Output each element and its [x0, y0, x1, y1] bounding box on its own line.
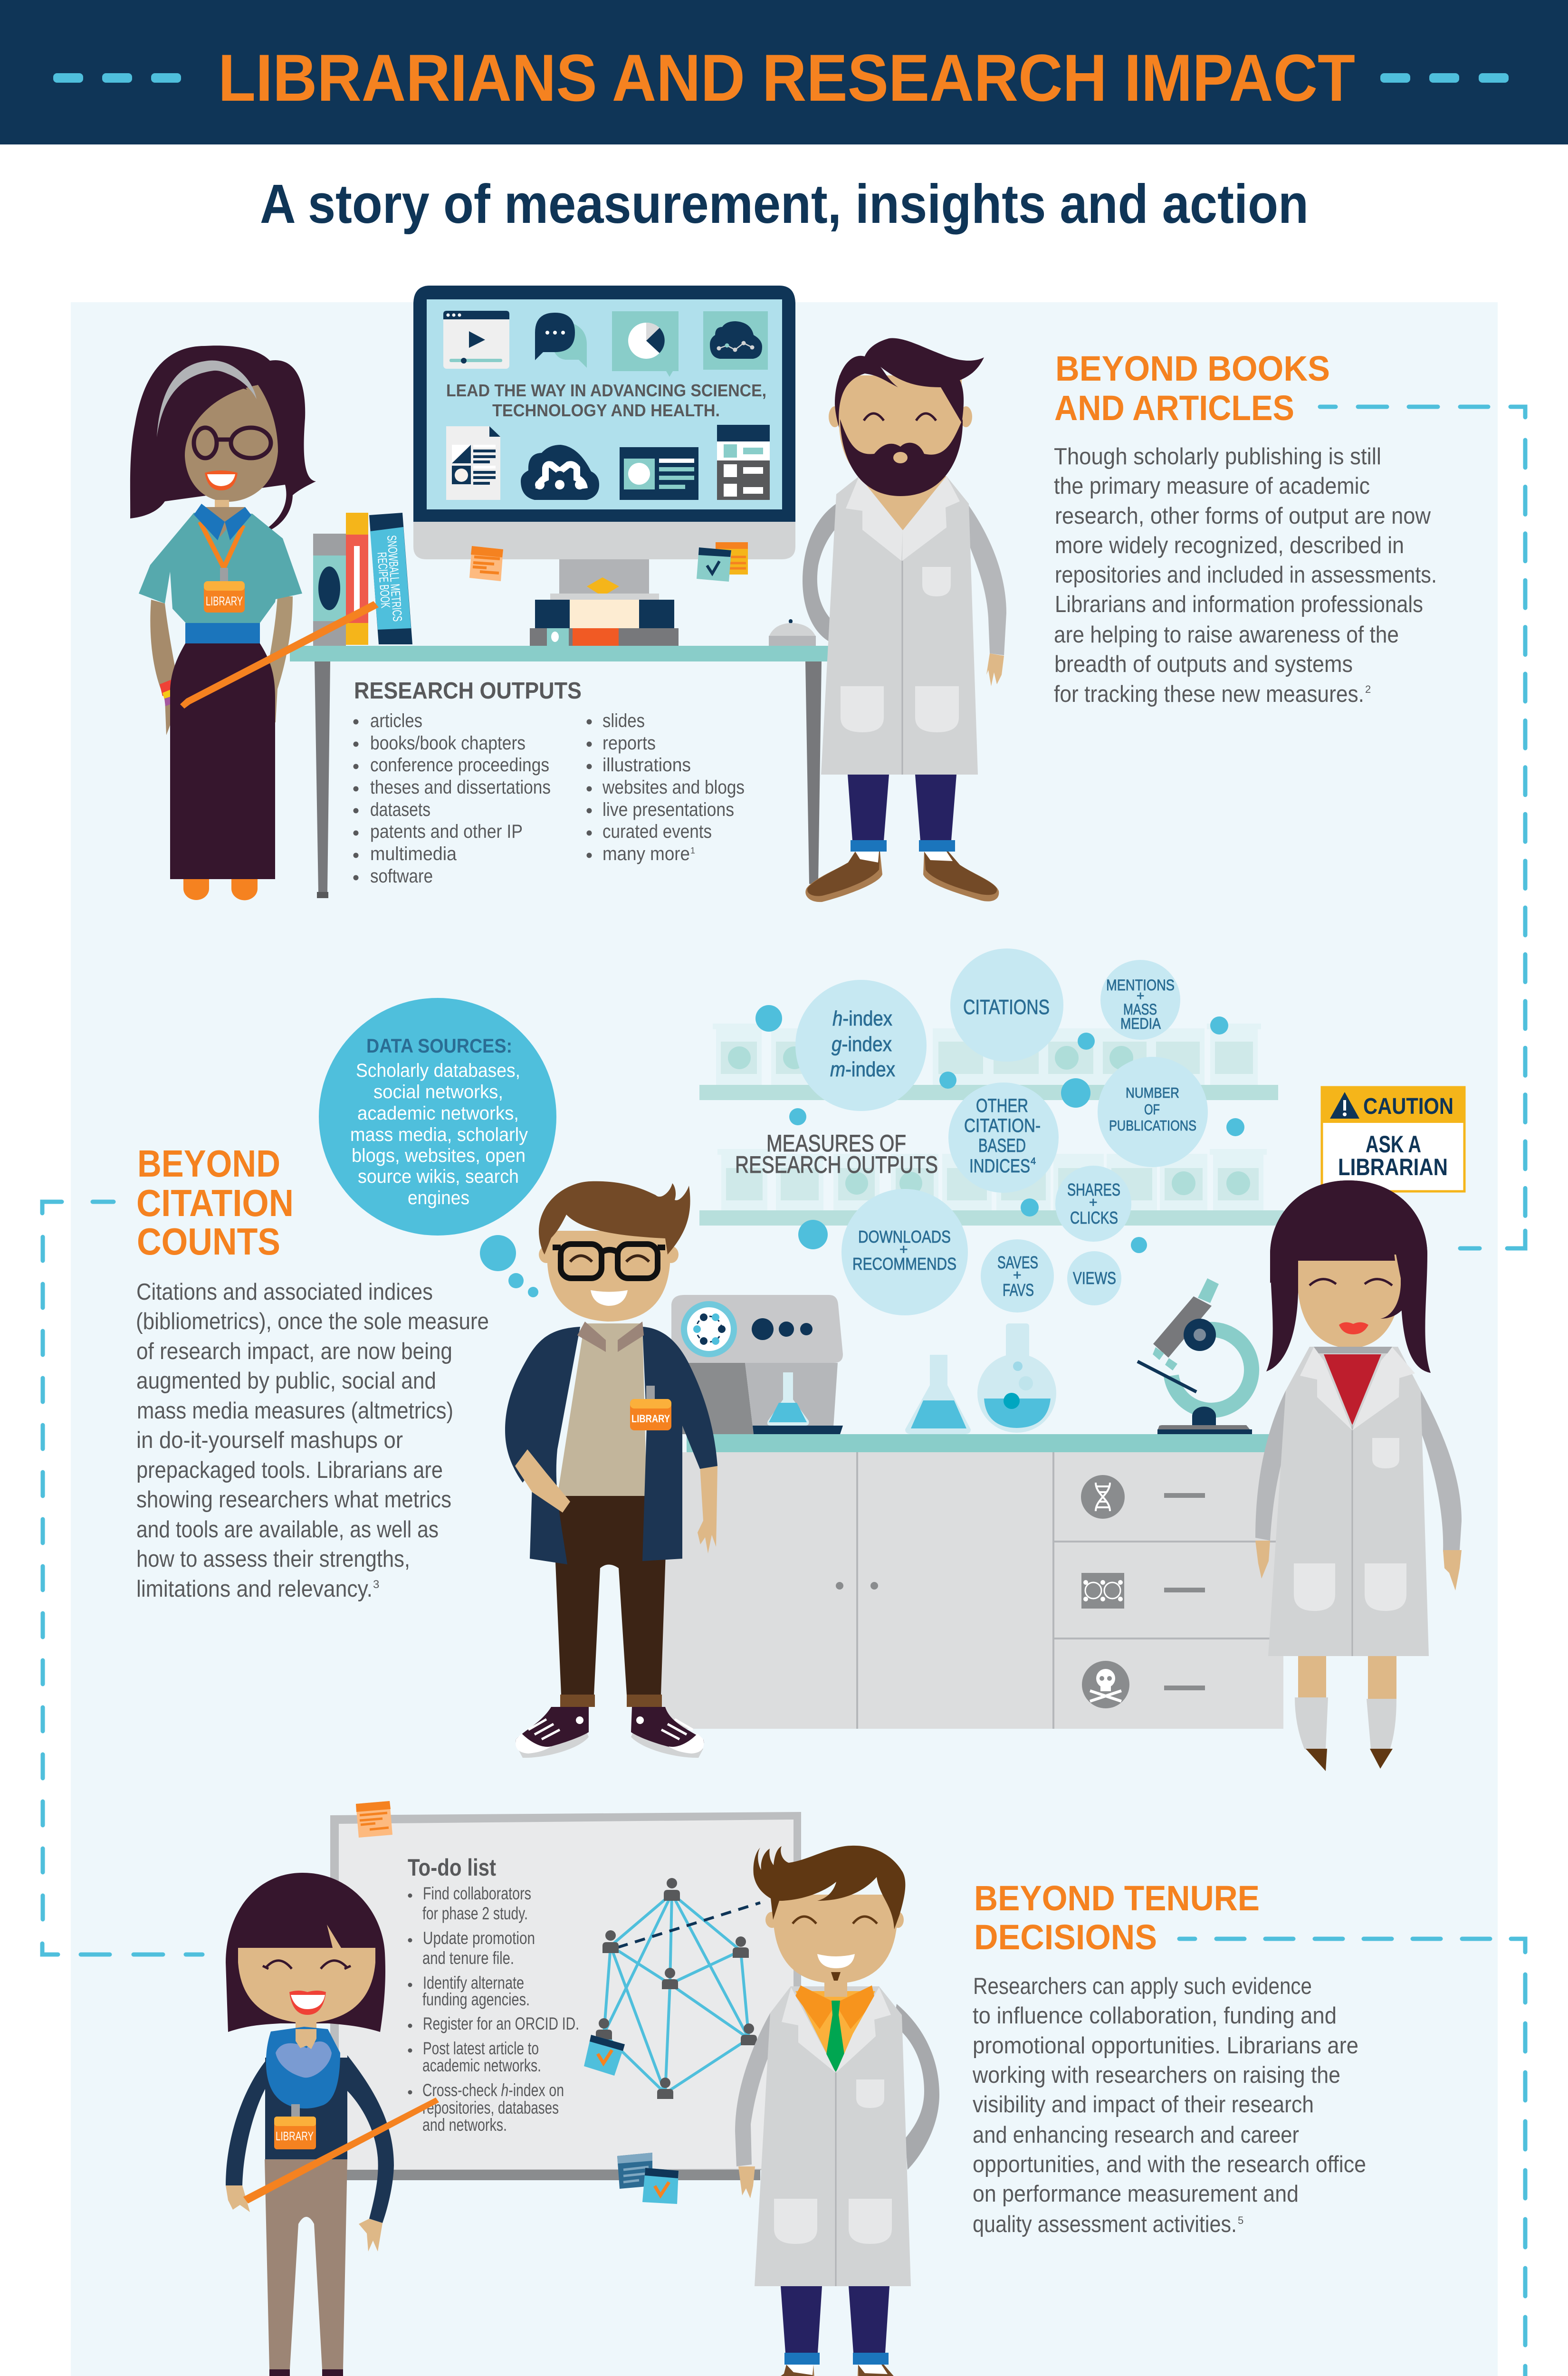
bubble: number of publications: NUMBER — [1126, 1084, 1179, 1101]
icon: dna — [1081, 1475, 1125, 1519]
bubble: mentions: MEDIA — [1120, 1015, 1161, 1032]
title: LIBRARIANS AND RESEARCH IMPACT — [218, 40, 1355, 115]
hair back — [1266, 1180, 1431, 1373]
sticky note: orange — [469, 546, 503, 581]
caution sign: CAUTION — [1363, 1094, 1453, 1119]
pointer — [180, 601, 379, 709]
face — [185, 385, 278, 502]
sticky note — [356, 1801, 392, 1838]
to-do list: Find collaborators — [423, 1884, 531, 1903]
heading: DECISIONS — [974, 1917, 1157, 1957]
body copy: 2 — [1365, 683, 1371, 695]
bubble: downloads — [852, 1227, 956, 1274]
mouse — [769, 619, 816, 646]
hair — [539, 1181, 690, 1255]
character: woman in lab coat — [1255, 1180, 1462, 1771]
counter and cabinets — [660, 1434, 1283, 1729]
research outputs list: websites and blogs — [602, 777, 745, 798]
round flask — [977, 1323, 1056, 1433]
trousers — [265, 2159, 347, 2369]
body copy: Researchers can apply such evidence — [973, 1974, 1312, 1999]
sticky notes: checklist — [697, 542, 748, 582]
microscope — [1138, 1278, 1252, 1434]
dashed connector: tenure to banner — [1179, 1939, 1525, 2376]
icon: document — [446, 426, 500, 500]
bubble: h-index — [830, 1007, 895, 1081]
thought bubble: data sources: Scholarly databases, — [356, 1060, 520, 1081]
research outputs list: many more — [602, 843, 690, 864]
heading — [1054, 349, 1330, 428]
fringe — [1270, 1180, 1427, 1319]
right arm and hand — [967, 506, 1006, 655]
books — [313, 513, 412, 646]
torso — [265, 2058, 347, 2159]
legs — [1298, 1654, 1326, 1699]
left arm — [803, 502, 841, 642]
eyes — [793, 1916, 877, 1924]
body copy: how to assess their strengths, — [136, 1546, 410, 1572]
dashed connector: books to citation — [1320, 407, 1525, 1248]
trousers — [848, 775, 889, 841]
body copy: quality assessment activities. — [973, 2212, 1237, 2237]
research outputs list: RESEARCH OUTPUTS — [354, 678, 582, 704]
bubble: shares: SHARES — [1067, 1180, 1120, 1199]
monitor stack of books — [530, 600, 679, 646]
research outputs list: slides — [602, 710, 645, 731]
arms — [893, 2004, 939, 2170]
right hand — [698, 1466, 717, 1553]
machine dial — [681, 1301, 737, 1357]
body copy: showing researchers what metrics — [136, 1487, 451, 1513]
bubble: h-index: h-index — [832, 1007, 892, 1030]
body copy: promotional opportunities. Librarians are — [973, 2033, 1358, 2059]
icon: speech bubbles — [535, 313, 587, 368]
bubble: number of publications: OF — [1144, 1101, 1160, 1118]
lab machine — [665, 1295, 843, 1434]
measure bubbles — [755, 948, 1244, 1315]
research outputs list: theses and dissertations — [370, 777, 551, 798]
body copy: for tracking these new measures. — [1054, 681, 1364, 707]
body copy: working with researchers on raising the — [972, 2062, 1340, 2088]
icon: mendeley cloud — [521, 445, 599, 500]
thought bubble: data sources — [319, 998, 556, 1297]
bubble: other indices: 4 — [1031, 1156, 1036, 1167]
heading: AND ARTICLES — [1054, 388, 1294, 428]
lab shelves and jars — [699, 1024, 1284, 1226]
bubble: mentions: MENTIONS — [1106, 977, 1175, 994]
monitor headline: LEAD THE WAY IN ADVANCING SCIENCE, — [446, 381, 766, 400]
body copy: prepackaged tools. Librarians are — [136, 1457, 443, 1483]
to-do list: academic networks. — [422, 2056, 541, 2075]
dashed connector: citation to tenure — [42, 1202, 202, 1954]
glasses — [194, 428, 271, 458]
body copy: Citations and associated indices — [136, 1279, 433, 1305]
research outputs list: reports — [602, 733, 656, 754]
thought bubble: data sources: DATA SOURCES: — [366, 1035, 512, 1057]
subtitle: A story of measurement, insights and action — [260, 173, 1309, 235]
sneakers — [518, 1730, 589, 1758]
trousers — [781, 2286, 822, 2353]
header band — [0, 0, 1568, 144]
text block: beyond books and articles — [1054, 349, 1437, 707]
research outputs list: 1 — [690, 846, 695, 855]
to-do list: and tenure file. — [422, 1948, 514, 1968]
thought bubble: data sources: blogs, websites, open — [352, 1145, 526, 1166]
bubble: other indices — [964, 1095, 1041, 1177]
face — [539, 1246, 554, 1263]
collar — [577, 1322, 606, 1352]
body copy: 5 — [1238, 2214, 1243, 2226]
research outputs list: datasets — [370, 799, 430, 820]
heading: CITATION — [136, 1182, 294, 1224]
to-do list: Post latest article to — [423, 2039, 539, 2058]
glasses — [553, 1244, 665, 1278]
left hand — [515, 1449, 570, 1513]
hair back — [130, 345, 316, 535]
caution sign — [1322, 1087, 1464, 1191]
to-do list: funding agencies. — [422, 1990, 530, 2009]
body copy: visibility and impact of their research — [973, 2092, 1314, 2117]
face — [238, 1948, 375, 2023]
thought bubble: data sources: social networks, — [373, 1082, 503, 1102]
bubble: downloads: RECOMMENDS — [852, 1254, 956, 1274]
background panel — [71, 302, 1498, 2376]
research outputs list: illustrations — [602, 755, 691, 776]
book spine title: SNOWBALL METRICS — [384, 535, 405, 622]
shirt — [139, 513, 302, 623]
trousers — [553, 1496, 668, 1695]
badge — [274, 2117, 316, 2149]
book spine title: RECIPE BOOK — [374, 552, 393, 609]
flask in machine — [767, 1372, 809, 1426]
badge — [630, 1399, 671, 1430]
research outputs list: software — [370, 866, 433, 887]
face — [1298, 1255, 1401, 1349]
measures label: MEASURES OF — [766, 1130, 906, 1157]
research outputs list: live presentations — [602, 799, 734, 820]
shoes — [739, 2365, 815, 2376]
to-do list: Register for an ORCID ID. — [423, 2014, 579, 2033]
arms — [1255, 1390, 1292, 1541]
badge: LIBRARY — [631, 1413, 670, 1425]
body copy: more widely recognized, described in — [1055, 533, 1404, 558]
face — [765, 1912, 779, 1928]
character: woman with scarf — [226, 1873, 439, 2376]
body copy: repositories and included in assessments. — [1055, 562, 1437, 588]
belt and skirt — [185, 623, 260, 643]
eyes and lips — [1310, 1279, 1392, 1285]
body copy: and tools are available, as well as — [136, 1517, 439, 1542]
measures label — [735, 1130, 938, 1178]
to-do list — [408, 1854, 579, 2135]
body copy: mass media measures (altmetrics) — [137, 1398, 453, 1424]
bubble: other indices: BASED — [978, 1135, 1026, 1156]
desk — [290, 646, 828, 898]
icon: dashboard — [717, 425, 770, 500]
body copy: Though scholarly publishing is still — [1054, 444, 1381, 469]
research outputs list: conference proceedings — [370, 755, 549, 776]
header dashes — [53, 73, 1509, 83]
badge — [204, 581, 245, 613]
bubble: other indices: OTHER — [976, 1095, 1028, 1116]
body copy — [1054, 444, 1437, 707]
body copy: on performance measurement and — [973, 2181, 1299, 2207]
network diagram — [596, 1878, 760, 2099]
body copy: and enhancing research and career — [973, 2122, 1299, 2148]
caution sign: LIBRARIAN — [1338, 1154, 1448, 1180]
arms — [226, 2061, 265, 2185]
bubble: number of publications: PUBLICATIONS — [1109, 1117, 1196, 1134]
character: man in cardigan — [505, 1181, 717, 1758]
body copy: are helping to raise awareness of the — [1054, 622, 1399, 648]
bubble: shares: CLICKS — [1070, 1208, 1118, 1227]
to-do list: To-do list — [408, 1854, 496, 1881]
heading — [136, 1142, 294, 1263]
monitor — [413, 286, 795, 600]
body copy: to influence collaboration, funding and — [973, 2003, 1337, 2029]
body copy: opportunities, and with the research office — [973, 2152, 1366, 2177]
research outputs list: books/book chapters — [370, 733, 526, 754]
bottom notes — [617, 2153, 679, 2204]
icon: video window — [443, 311, 509, 369]
bubble: mentions: MASS — [1123, 1001, 1157, 1018]
to-do list: for phase 2 study. — [422, 1904, 528, 1923]
icon: skull — [1082, 1661, 1129, 1708]
to-do list: Update promotion — [423, 1928, 535, 1948]
bubble: saves: FAVS — [1003, 1280, 1034, 1300]
pointer — [243, 2098, 439, 2204]
body copy: research, other forms of output are now — [1055, 503, 1431, 529]
character: man with green tie — [735, 1846, 939, 2376]
body copy: (bibliometrics), once the sole measure — [136, 1309, 489, 1334]
body copy: in do-it-yourself mashups or — [136, 1428, 403, 1453]
heading: COUNTS — [137, 1220, 280, 1263]
bubble: downloads: + — [899, 1242, 908, 1257]
body copy: 3 — [373, 1578, 379, 1591]
to-do list: and networks. — [422, 2115, 507, 2135]
bubble: mentions — [1106, 977, 1175, 1032]
icon: cloud chart — [703, 311, 768, 370]
bubble: shares — [1067, 1180, 1120, 1227]
hair — [835, 338, 984, 428]
research outputs list: patents and other IP — [370, 821, 523, 842]
thought bubble: data sources: academic networks, — [357, 1103, 519, 1124]
caution sign: ASK A — [1366, 1131, 1421, 1158]
thought bubble: data sources: source wikis, search — [358, 1166, 519, 1187]
bubble: saves: SAVES — [997, 1253, 1038, 1272]
feet — [269, 2369, 290, 2376]
body copy: augmented by public, social and — [136, 1368, 436, 1394]
bubble: saves — [997, 1253, 1038, 1300]
monitor headline — [446, 381, 766, 420]
measures label: RESEARCH OUTPUTS — [735, 1151, 938, 1178]
book spine title — [373, 535, 405, 623]
to-do list: Identify alternate — [423, 1973, 524, 1993]
lab coat — [755, 1986, 911, 2286]
badge: LIBRARY — [276, 2129, 314, 2143]
character: bearded man in lab coat — [803, 338, 1006, 902]
vest — [557, 1323, 647, 1496]
to-do list: Cross-check h-index on — [422, 2080, 564, 2100]
hair — [754, 1846, 905, 1929]
bubble: h-index: g-index — [832, 1033, 892, 1056]
conical flask — [905, 1355, 971, 1434]
body copy: limitations and relevancy. — [136, 1576, 373, 1602]
heading: BEYOND TENURE — [974, 1878, 1260, 1918]
scarf — [266, 2027, 340, 2108]
mouth — [205, 470, 238, 490]
body copy: breadth of outputs and systems — [1054, 651, 1353, 677]
icon: profile card — [620, 447, 698, 500]
check note — [584, 2035, 625, 2076]
character: woman with pointer — [130, 345, 379, 900]
body copy: Librarians and information professionals — [1055, 592, 1423, 617]
face and ears — [829, 406, 841, 427]
to-do list: repositories, databases — [422, 2098, 559, 2117]
bubble: other indices: CITATION- — [964, 1115, 1041, 1136]
research outputs list: multimedia — [370, 843, 457, 864]
eyes — [864, 413, 936, 421]
heading — [974, 1878, 1260, 1957]
cardigan — [505, 1327, 580, 1564]
bubble: saves: + — [1013, 1267, 1022, 1283]
lab coat — [821, 476, 978, 775]
smile — [591, 1290, 628, 1306]
hair — [226, 1873, 385, 2032]
bubble: citations: CITATIONS — [963, 996, 1050, 1019]
bubble: h-index: m-index — [830, 1058, 895, 1081]
smile — [817, 1954, 855, 1968]
beard — [840, 419, 963, 496]
text block: beyond tenure decisions — [972, 1878, 1366, 2237]
icon: pie chart — [612, 311, 679, 377]
badge: LIBRARY — [206, 594, 243, 608]
research outputs list — [354, 678, 745, 887]
bubble: shares: + — [1089, 1195, 1098, 1210]
body copy: of research impact, are now being — [136, 1339, 452, 1364]
icon: molecule — [1081, 1573, 1124, 1609]
bubble: other indices: INDICES — [969, 1156, 1030, 1177]
bubble: downloads: DOWNLOADS — [858, 1227, 951, 1246]
thought bubble: data sources: engines — [408, 1188, 469, 1208]
body copy — [136, 1279, 489, 1602]
thought bubble: data sources: mass media, scholarly — [350, 1124, 528, 1145]
lab coat — [1268, 1347, 1429, 1656]
heading: BEYOND BOOKS — [1055, 349, 1330, 388]
body copy: the primary measure of academic — [1054, 473, 1370, 499]
bubble: views: VIEWS — [1073, 1268, 1116, 1288]
shoes — [805, 852, 882, 902]
monitor headline: TECHNOLOGY AND HEALTH. — [492, 401, 720, 420]
text block: beyond citation counts — [136, 1142, 489, 1602]
bubble: mentions: + — [1137, 988, 1144, 1003]
research outputs list: articles — [370, 710, 422, 731]
research outputs list: curated events — [602, 821, 712, 842]
bubble: number of publications — [1109, 1084, 1196, 1134]
body copy — [972, 1974, 1366, 2237]
arms — [150, 600, 191, 735]
heading: BEYOND — [137, 1142, 280, 1185]
whiteboard — [330, 1801, 801, 2204]
